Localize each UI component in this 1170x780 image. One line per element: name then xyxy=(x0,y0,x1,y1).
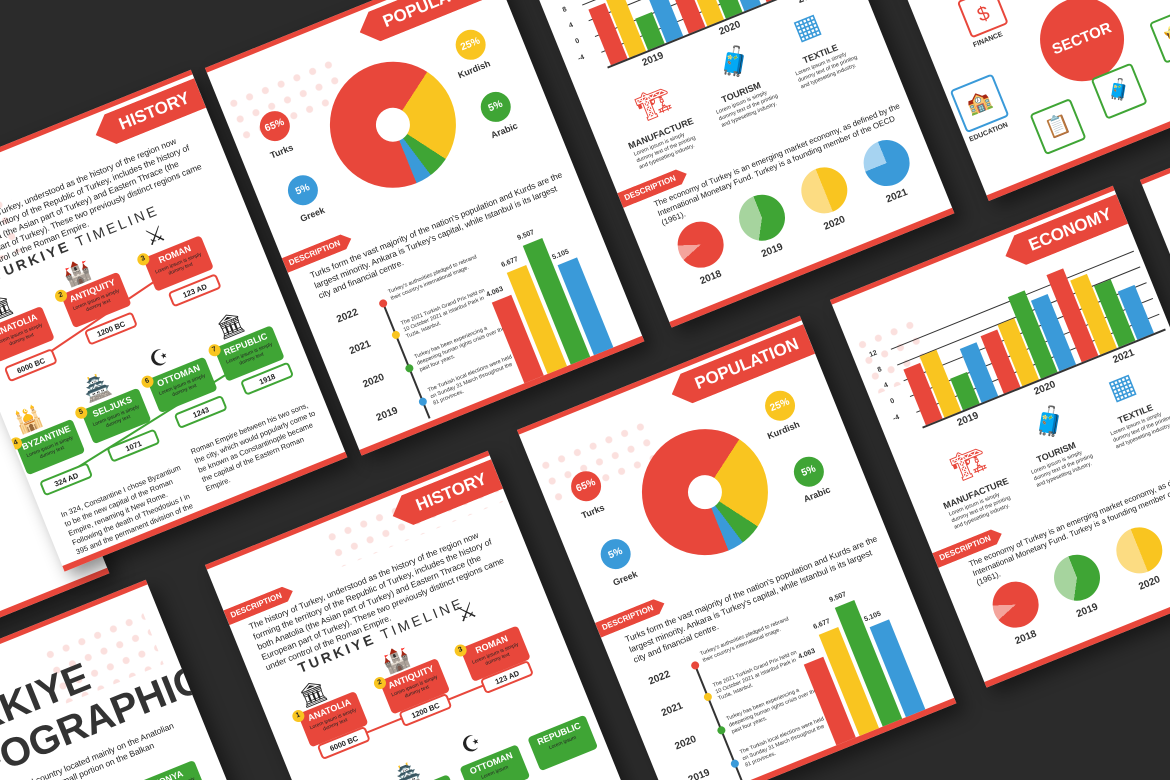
timeline: years: The Turkish local elections were held on Sunday 31 March throughout the 81 provinces. xyxy=(427,354,513,407)
tag: description: DESCRIPTION xyxy=(288,239,342,267)
chart: donut xyxy=(311,43,475,207)
chart: grouped bars: -4 xyxy=(577,54,585,63)
box: konya xyxy=(136,760,207,780)
timeline row 1: ANTIQUITY xyxy=(387,663,435,691)
timeline: years: The 2021 Turkish Grand Prix held on 10 October 2021 at Istanbul Park in Tuzla, Istanbul. xyxy=(400,288,486,340)
timeline row 1: 3 xyxy=(140,255,146,263)
timeline row 2: 6 xyxy=(144,377,150,385)
tag: description xyxy=(282,234,352,273)
chart: grouped bars: -4 xyxy=(892,414,900,423)
banner: population xyxy=(360,0,482,42)
timeline row 2: OTTOMAN xyxy=(156,363,201,389)
tag: description xyxy=(618,170,687,208)
timeline: years: 2021 xyxy=(660,700,685,719)
tag: description xyxy=(224,586,293,625)
timeline row 1: ROMAN xyxy=(157,243,192,265)
chart: grouped bars: 2019 xyxy=(956,410,980,429)
chart: pies xyxy=(992,527,1162,647)
card: turkiye infographic xyxy=(0,580,302,780)
card: economy (right) xyxy=(830,186,1170,688)
timeline row 1: ANTIQUITY xyxy=(68,277,117,304)
icon: education: 🏫 xyxy=(964,88,995,117)
label: turks: Turks xyxy=(580,502,606,521)
timeline: years: 2020 xyxy=(361,372,386,390)
icons: sectors row: Lorem ipsum is simply dummy text of the printing and typesetting industry. xyxy=(715,90,779,129)
chart: grouped bars: 8 xyxy=(877,366,883,374)
bubble: greek xyxy=(283,171,322,210)
icons: sectors row: Lorem ipsum is simply dummy text of the printing and typesetting industry. xyxy=(795,51,858,90)
text: economy description: The economy of Turkey is an emerging market economy, as defined by the International Monetary Fund. Turkey is a founding member of the OECD (1961). xyxy=(653,101,901,227)
timeline row 1 xyxy=(292,597,533,759)
icons: sectors row: ▦ xyxy=(789,7,825,46)
label: turks: Turks xyxy=(269,142,295,160)
timeline row 1: 6000 BC xyxy=(329,734,359,753)
timeline row 2: REPUBLIC xyxy=(536,720,582,747)
timeline row 2: 324 AD xyxy=(53,471,80,489)
bubble: arabic: 5% xyxy=(487,99,504,114)
timeline row 2: OTTOMAN xyxy=(468,750,514,776)
timeline row 2: 1243 xyxy=(191,405,210,420)
label: finance: FINANCE xyxy=(972,31,1004,49)
bubble: kurdish xyxy=(761,386,800,425)
label: arabic: Arabic xyxy=(489,121,519,140)
timeline: years xyxy=(647,616,825,780)
label: arabic: Arabic xyxy=(802,484,832,504)
card: economy (top) xyxy=(515,0,954,328)
timeline row 1: 🏛 xyxy=(295,677,331,710)
label: greek: Greek xyxy=(299,205,326,224)
bubble: kurdish xyxy=(451,25,490,64)
chart: grouped bars: 4 xyxy=(568,22,574,30)
timeline row 2: Lorem ipsum is simply dummy text xyxy=(158,373,206,398)
timeline row 1: Lorem ipsum is simply dummy text xyxy=(471,642,519,667)
bubble: greek xyxy=(596,535,635,574)
timeline row 1: 1200 BC xyxy=(96,319,127,339)
chart: pies: 2018 xyxy=(1014,628,1038,647)
timeline: years: Turkey's authorities pledged to rebrand their country's international image. xyxy=(699,616,790,664)
timeline row 1: 3 xyxy=(457,646,464,654)
icons: sectors row: 🧳 xyxy=(712,41,756,83)
text: population description: Turks form the vast majority of the nation's population and Kurds are the largest minority. Ankara is Turkey's capital, while Istanbul is its largest city and financial centre. xyxy=(624,533,879,665)
icons: sectors row: ▦ xyxy=(1104,367,1140,406)
card: population (top) xyxy=(205,0,644,456)
tag: description: DESCRIPTION xyxy=(601,603,655,632)
timeline row 1: 123 AD xyxy=(494,669,520,686)
timeline: years: Turkey has been experiencing a deepening human rights crisis over the past four years. xyxy=(726,687,818,735)
timeline: years: 2019 xyxy=(375,405,400,424)
chart: pies: 2021 xyxy=(884,187,909,205)
timeline row 2: Lorem ipsum xyxy=(548,735,577,751)
timeline row 1: 6000 BC xyxy=(16,356,46,375)
timeline: years: The Turkish local elections were held on Sunday 31 March throughout the 81 provinces. xyxy=(739,716,825,769)
timeline row 1: 1 xyxy=(295,712,301,720)
card: left edge sliver xyxy=(0,186,109,688)
icon: management xyxy=(1029,98,1087,155)
icons: sectors row: Lorem ipsum is simply dummy text of the printing and typesetting industry. xyxy=(1030,450,1094,489)
timeline row 1: 123 AD xyxy=(182,282,208,300)
icon: tourism: 🧳 xyxy=(1104,76,1135,106)
bubble: turks xyxy=(255,107,294,146)
timeline row 1: ROMAN xyxy=(474,633,509,655)
chart: grouped bars xyxy=(868,250,1166,429)
timeline row 2: 🏯 xyxy=(79,371,114,404)
bubble: greek: 5% xyxy=(294,182,311,198)
icons: sectors row: TOURISM xyxy=(720,80,762,105)
icon: agriculture xyxy=(1149,7,1170,64)
chart: bars xyxy=(797,591,926,746)
chart: bars xyxy=(485,229,614,384)
timeline row 2: Lorem ipsum is simply dummy text xyxy=(225,341,273,367)
chart: bars: 6.677 xyxy=(500,256,519,269)
timeline row 2: 1071 xyxy=(124,439,143,453)
timeline: years: 2022 xyxy=(647,669,672,687)
icons: sectors row: TOURISM xyxy=(1035,440,1077,465)
timeline: years: The 2021 Turkish Grand Prix held on 10 October 2021 at Istanbul Park in Tuzla, Istanbul. xyxy=(712,650,798,702)
chart: grouped bars: 12 xyxy=(868,349,878,359)
chart: grouped bars: 2020 xyxy=(718,19,742,38)
icons: sectors row: MANUFACTURE xyxy=(627,116,695,151)
chart: pies: 2019 xyxy=(760,241,785,260)
chart: bars: 5.105 xyxy=(551,248,570,261)
text: history bottom 2: Roman Empire between his two sons, the city, which would popularly come to be known as Constantinople became the capital of the Eastern Roman Empire. xyxy=(189,401,317,493)
circle: sector: SECTOR xyxy=(1050,19,1114,58)
chart: grouped bars: 2021 xyxy=(1111,347,1136,366)
timeline: years: 2020 xyxy=(673,734,698,752)
card: far right xyxy=(1140,66,1170,568)
label: kurdish: Kurdish xyxy=(456,58,492,80)
bubble: greek: 5% xyxy=(607,546,624,561)
chart: grouped bars: 2020 xyxy=(1033,379,1057,398)
banner: economy: ECONOMY xyxy=(1026,204,1114,255)
chart: pies xyxy=(678,140,910,287)
label: education: EDUCATION xyxy=(968,122,1009,143)
timeline: years: Turkey's authorities pledged to rebrand their country's international image. xyxy=(387,254,478,302)
chart: pies: 2020 xyxy=(1137,574,1162,593)
icons: sectors row: Lorem ipsum is simply dummy text of the printing and typesetting industry. xyxy=(948,492,1012,531)
timeline row 1: ⚔ xyxy=(453,597,480,627)
bubble: arabic xyxy=(789,452,828,491)
icon: finance xyxy=(957,0,1009,39)
banner: history xyxy=(96,78,206,144)
chart: pies: 2019 xyxy=(1075,601,1100,620)
tag: description: DESCRIPTION xyxy=(229,591,283,620)
timeline row 1: 🏰 xyxy=(379,643,414,677)
timeline row 2: 7 xyxy=(211,346,218,354)
bubble: turks: 65% xyxy=(575,477,597,495)
chart: grouped bars: 2019 xyxy=(641,50,665,69)
bubble: kurdish: 25% xyxy=(459,35,482,53)
label: kurdish: Kurdish xyxy=(766,419,801,441)
timeline: years xyxy=(335,254,513,424)
icons: sectors row xyxy=(627,7,858,171)
timeline row 1: 1200 BC xyxy=(410,701,441,720)
timeline row 1 xyxy=(0,220,221,382)
text: history bottom: In 324, Constantine I chose Byzantium to be the new capital of the Roman Empire, renaming it New Rome. Following the death of Theodosius I in 395 and the permanent division of the xyxy=(60,463,194,556)
icon: education xyxy=(950,73,1010,133)
chart: bars: 4.063 xyxy=(485,286,504,299)
timeline: years: Turkey has been experiencing a deepening human rights crisis over the past four years. xyxy=(414,325,506,373)
chart: grouped bars xyxy=(562,0,821,69)
timeline row 2: SELJUKS xyxy=(91,394,133,419)
timeline row 2: 🕌 xyxy=(11,403,46,436)
timeline row 2: REPUBLIC xyxy=(222,331,269,357)
icons: sectors row: TEXTILE xyxy=(801,42,839,65)
timeline row 2: BYZANTINE xyxy=(20,423,72,452)
icons: sectors row: 🏗 xyxy=(632,82,676,124)
banner: population: POPULATION xyxy=(692,334,801,393)
tag: description: DESCRIPTION xyxy=(938,534,992,562)
timeline row 2: Lorem ipsum is simply dummy text xyxy=(92,404,140,429)
tag: description xyxy=(595,599,664,638)
bubble: arabic: 5% xyxy=(800,463,817,479)
banner: population xyxy=(672,324,815,404)
timeline row 2: ☪ xyxy=(457,729,485,759)
timeline row 2: ☪ xyxy=(146,343,173,373)
timeline row 2: 1918 xyxy=(258,372,277,386)
card: history (bottom) xyxy=(205,451,644,780)
bubble: arabic xyxy=(476,87,515,126)
timeline row 1: Lorem ipsum is simply dummy text xyxy=(72,288,120,313)
chart: bars: 5.105 xyxy=(863,610,882,623)
label: greek: Greek xyxy=(611,569,639,588)
chart: grouped bars: 4 xyxy=(883,382,889,390)
card: sector xyxy=(824,0,1170,201)
icons: sectors row: TEXTILE xyxy=(1116,402,1154,425)
chart: bars: 4.063 xyxy=(797,648,816,661)
icons: sectors row xyxy=(942,367,1170,531)
icons: sectors row: MANUFACTURE xyxy=(942,476,1010,511)
timeline row 1: 2 xyxy=(58,291,64,299)
timeline row 1: 2 xyxy=(377,679,383,687)
timeline row 1: 🏰 xyxy=(60,256,95,289)
timeline row 1: Lorem ipsum is simply dummy text xyxy=(309,707,357,732)
chart: grouped bars: 8 xyxy=(562,6,568,14)
tag: description xyxy=(932,530,1002,568)
timeline row 1: Lorem ipsum is simply dummy text xyxy=(154,251,203,277)
banner: economy xyxy=(1006,194,1128,265)
icon: finance: $ xyxy=(974,2,993,27)
timeline row 2 xyxy=(390,716,597,780)
timeline: years: 2021 xyxy=(348,338,373,357)
timeline row 2: 🏛 xyxy=(213,308,248,342)
text: history intro: The history of Turkey, understood as the history of the region now forming the territory of the Republic of Turkey, includes the history of both Anatolia (the Asian part of Turkey) and Eastern Thrace (the European part of Turkey). These two previously distinct regions came under control of the Roman Empire. xyxy=(248,530,505,672)
chart: bars: 9.507 xyxy=(828,591,847,604)
icon: tourism xyxy=(1091,62,1148,120)
banner: history: HISTORY xyxy=(116,88,192,134)
bubble: turks xyxy=(567,467,606,506)
timeline row 2: 4 xyxy=(13,439,19,447)
timeline: years: 2022 xyxy=(335,307,360,325)
icons: sectors row: 🧳 xyxy=(1027,401,1071,443)
icon: management: 📋 xyxy=(1042,112,1074,141)
chart: bars: 9.507 xyxy=(516,229,535,242)
heading: turkiye timeline: TURKIYE TIMELINE xyxy=(296,595,466,676)
chart: pies: 2020 xyxy=(822,214,847,233)
icons: sectors row: 🏗 xyxy=(947,442,991,484)
timeline row 2: 5 xyxy=(78,408,84,416)
card: population (middle) xyxy=(517,316,956,780)
timeline row 1: Lorem ipsum is simply dummy text xyxy=(391,674,439,699)
chart: pies: 2018 xyxy=(699,268,723,287)
timeline row 2 xyxy=(11,308,293,496)
bubble: turks: 65% xyxy=(263,117,286,134)
circle: sector xyxy=(1027,0,1137,94)
chart: donut xyxy=(623,410,787,574)
timeline row 1: ANATOLIA xyxy=(306,697,352,723)
text: population description: Turks form the vast majority of the nation's population and Kurds are the largest minority. Ankara is Turkey's capital, while Istanbul is its largest city and financial centre. xyxy=(309,169,564,301)
banner: history xyxy=(392,459,503,525)
timeline row 2: Lorem ipsum is simply dummy text xyxy=(26,435,74,460)
timeline row 1: ⚔ xyxy=(141,220,169,251)
tag: description: DESCRIPTION xyxy=(623,174,677,202)
bubble: kurdish: 25% xyxy=(769,396,791,414)
chart: grouped bars: 0 xyxy=(574,37,581,45)
chart: bars: 6.677 xyxy=(812,618,831,631)
banner: history: HISTORY xyxy=(413,469,489,515)
chart: grouped bars: 0 xyxy=(889,397,896,405)
card: history (top left) xyxy=(0,70,347,572)
icons: sectors row: Lorem ipsum is simply dummy text of the printing and typesetting industry. xyxy=(633,132,697,171)
